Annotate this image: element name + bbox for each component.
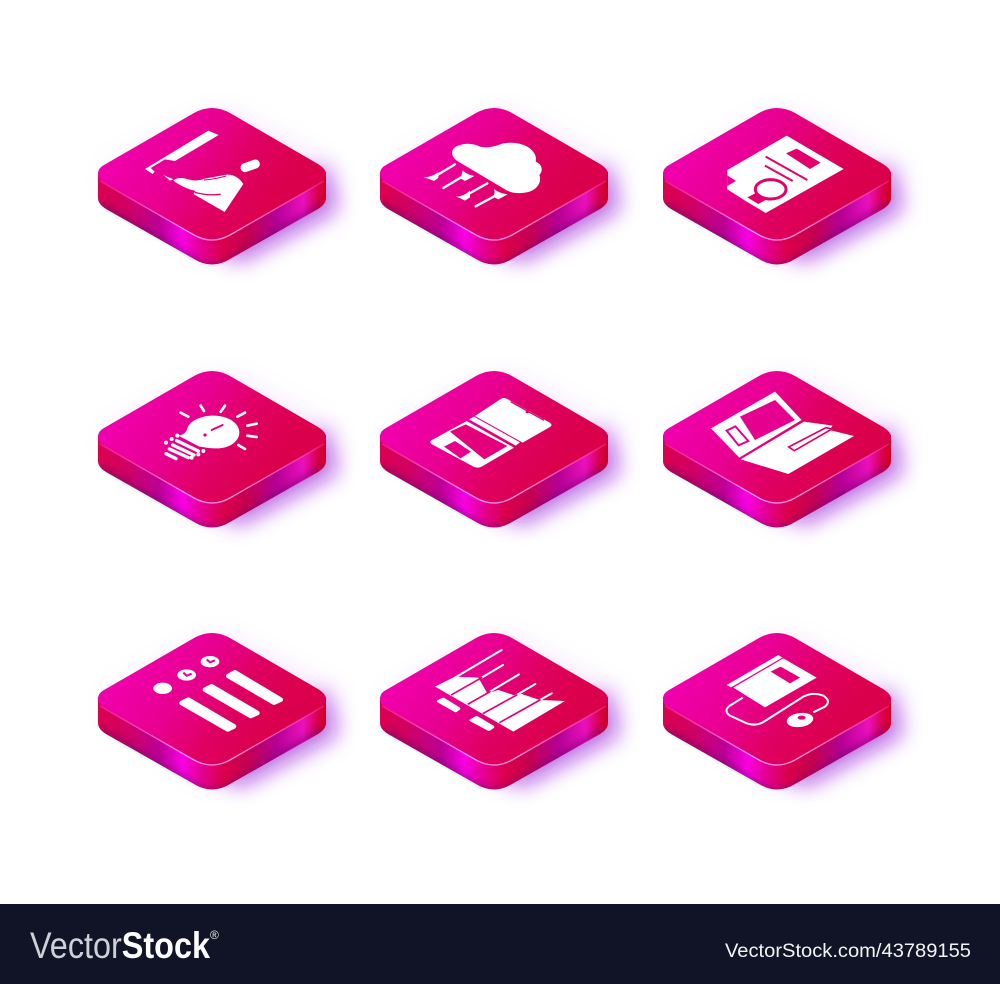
icon: document with magnifier	[727, 136, 844, 213]
tile base	[663, 371, 903, 530]
tile: light bulb	[98, 371, 338, 530]
logo wordmark: VectorStock	[30, 925, 210, 966]
icon: mobile screens	[430, 398, 552, 468]
tile base	[98, 371, 338, 530]
tile base	[380, 633, 620, 792]
tile: laptop	[663, 371, 903, 530]
tile base	[98, 108, 338, 267]
tile base	[380, 371, 620, 530]
tile: checklist	[98, 633, 338, 792]
tile: area chart	[380, 633, 620, 792]
tile: computer and mouse	[663, 633, 903, 792]
image id: VectorStock.com/43789155	[725, 941, 971, 962]
icon: checklist	[153, 656, 281, 729]
tile: pencil and broom	[98, 108, 338, 267]
icon: area chart	[435, 650, 565, 732]
icon: laptop	[711, 392, 854, 474]
tile: mobile app	[380, 371, 620, 530]
footer banner	[0, 904, 1000, 984]
icon: window with mouse	[726, 655, 828, 729]
tile base	[98, 633, 338, 792]
tile: document	[663, 108, 903, 267]
icon: light bulb	[164, 406, 257, 460]
tile base	[663, 108, 903, 267]
tile base	[663, 633, 903, 792]
icon: pencil and broom	[145, 131, 255, 212]
tile: cloud	[380, 108, 620, 267]
icon: cloud with drops	[423, 143, 542, 206]
registered mark: ®	[210, 928, 219, 942]
tile base	[380, 108, 620, 267]
